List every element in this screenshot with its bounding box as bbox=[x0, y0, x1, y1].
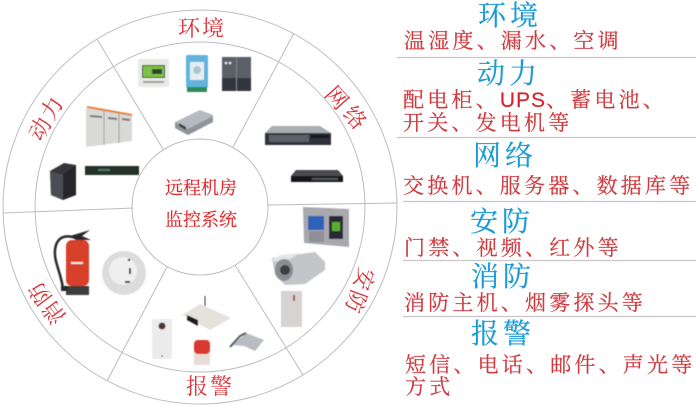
wheel label: alarm: 报警 bbox=[186, 374, 234, 399]
panel: system wheel bbox=[3, 10, 397, 404]
section: alarm: 短信、电话、邮件、声光等 bbox=[405, 353, 695, 377]
icon: PIR motion sensor bbox=[281, 291, 302, 327]
icon: power distribution cabinet bbox=[86, 106, 132, 147]
section: alarm bbox=[405, 318, 695, 399]
icon: rack power unit bbox=[85, 166, 139, 175]
icon: blue sensor module bbox=[186, 55, 208, 92]
icon: UPS tower bbox=[50, 163, 76, 200]
device icons bbox=[50, 55, 349, 365]
icon: smoke detector bbox=[102, 251, 146, 295]
panel: descriptions bbox=[397, 0, 696, 399]
icon: SMS gateway bbox=[182, 296, 231, 330]
icon: sound-light siren bbox=[194, 340, 210, 365]
icon: fire extinguisher bbox=[55, 230, 91, 295]
section: environment: 环境 bbox=[478, 0, 542, 32]
section: fire protection: 消防 bbox=[471, 261, 535, 293]
icon: grey monitoring box bbox=[175, 110, 213, 135]
section: power: 动力 bbox=[477, 58, 541, 90]
section: alarm: 方式 bbox=[405, 375, 453, 399]
section: fire protection: 消防主机、烟雾探头等 bbox=[404, 291, 646, 315]
section: power bbox=[403, 58, 667, 135]
section: fire protection bbox=[404, 261, 646, 315]
section: power: 配电柜、UPS、蓄电池、 bbox=[403, 88, 667, 112]
icon: rack server bbox=[265, 126, 331, 145]
wheel label: power: 动力 bbox=[24, 91, 69, 145]
center title bbox=[165, 178, 237, 230]
section: environment bbox=[404, 0, 622, 53]
wheel label: security: 安防 bbox=[340, 264, 379, 318]
icon: power meter bbox=[138, 59, 169, 87]
icon: white camera sensor bbox=[152, 319, 172, 359]
section: environment: 温湿度、漏水、空调 bbox=[404, 29, 622, 53]
center title: 监控系统 bbox=[165, 210, 237, 230]
section: security: 安防 bbox=[470, 206, 534, 238]
section: network: 网络 bbox=[473, 140, 537, 172]
section: power: 开关、发电机等 bbox=[403, 111, 572, 135]
section: security: 门禁、视频、红外等 bbox=[404, 236, 622, 260]
icon: network switch bbox=[291, 170, 343, 182]
icon: telephone bbox=[230, 333, 264, 351]
section: alarm: 报警 bbox=[471, 318, 535, 350]
icon: bullet camera bbox=[269, 252, 325, 285]
wheel label: network: 网络 bbox=[320, 81, 375, 138]
section: security bbox=[404, 206, 622, 260]
icon: access control terminal bbox=[303, 207, 349, 247]
center title: 远程机房 bbox=[165, 178, 237, 198]
section: network: 交换机、服务器、数据库等 bbox=[403, 174, 693, 198]
wheel label: environment: 环境 bbox=[178, 16, 226, 41]
wheel label: fire protection: 消防 bbox=[22, 276, 71, 329]
icon: precision air conditioner bbox=[222, 57, 251, 91]
section: network bbox=[403, 140, 693, 198]
